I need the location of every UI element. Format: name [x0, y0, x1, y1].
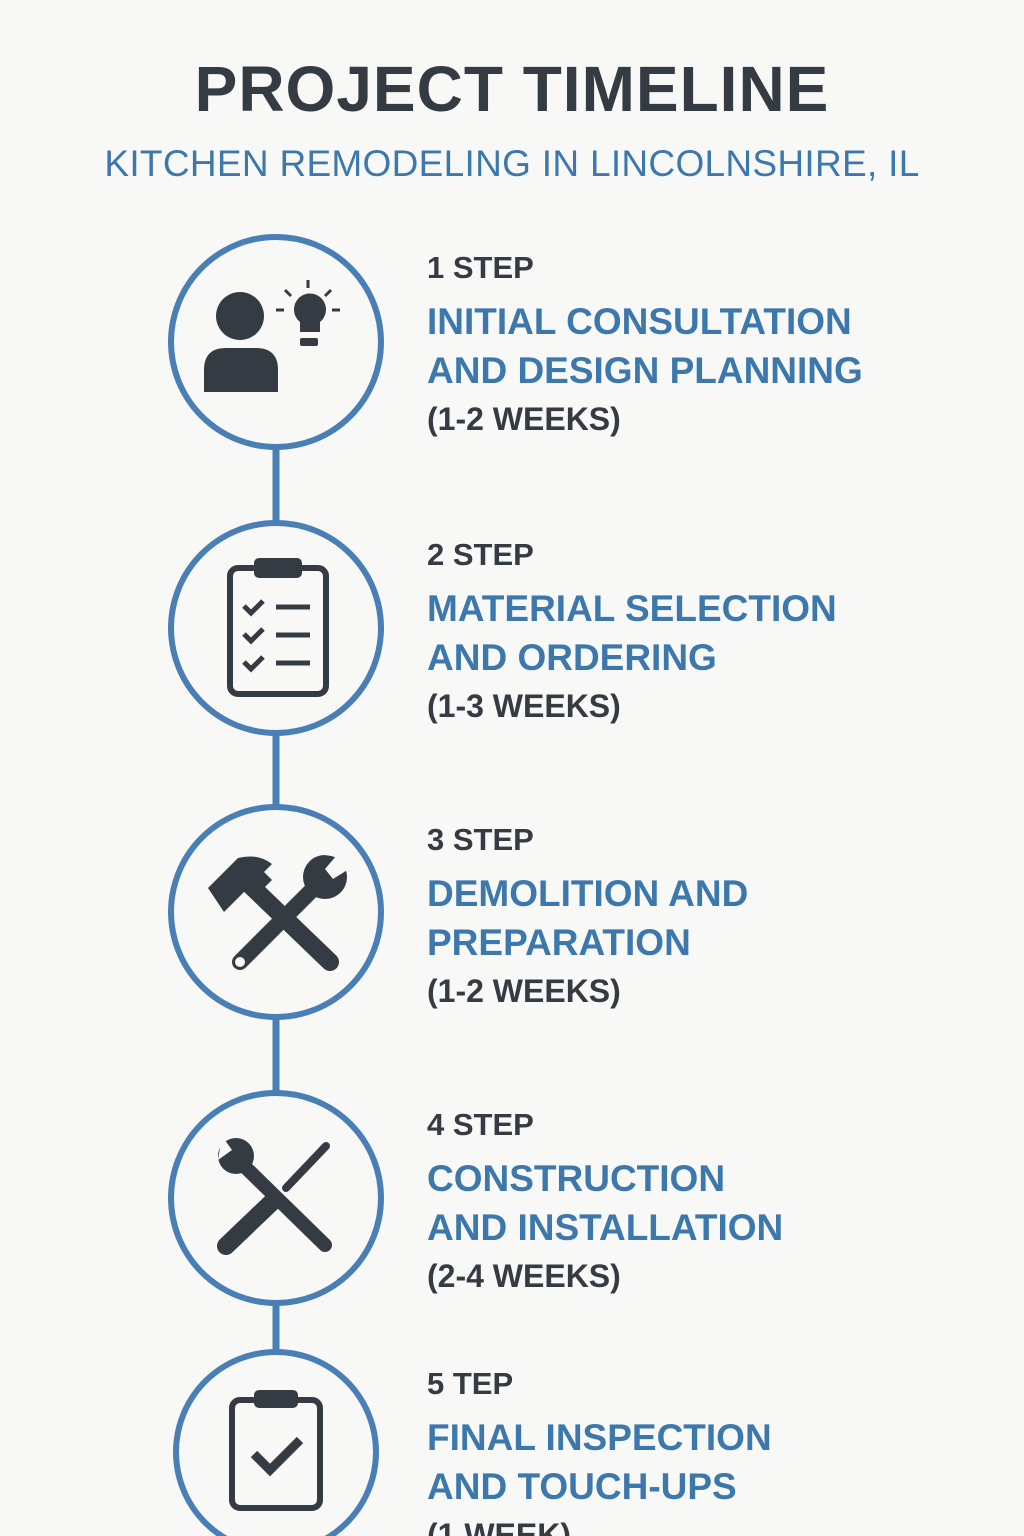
- step 4 text: CONSTRUCTION: [427, 1158, 725, 1199]
- step 5 text: FINAL INSPECTION: [427, 1417, 772, 1458]
- step 1 text: (1-2 WEEKS): [427, 401, 621, 437]
- connector lines: [272, 447, 280, 1352]
- step 2 text: MATERIAL SELECTION: [427, 588, 837, 629]
- circle 2 with clipboard checklist icon: [171, 523, 381, 733]
- subtitle: KITCHEN REMODELING IN LINCOLNSHIRE, IL: [104, 143, 920, 184]
- step 1 text: 1 STEP: [427, 250, 534, 285]
- step 2 text: (1-3 WEEKS): [427, 688, 621, 724]
- circle 1 with person and bulb icon: [171, 237, 381, 447]
- circle 5 with clipboard check icon: [176, 1352, 376, 1536]
- step 1 text: AND DESIGN PLANNING: [427, 350, 863, 391]
- step 3 text: [427, 822, 748, 1009]
- step 4 text: [427, 1107, 783, 1294]
- step 5 text: 5 TEP: [427, 1366, 513, 1401]
- step 2 text: 2 STEP: [427, 537, 534, 572]
- step 4 text: 4 STEP: [427, 1107, 534, 1142]
- step 5 text: [427, 1366, 772, 1536]
- step 1 text: INITIAL CONSULTATION: [427, 301, 852, 342]
- step 2 text: [427, 537, 837, 724]
- circle 4 with wrench and screwdriver icon: [171, 1093, 381, 1303]
- step 2 text: AND ORDERING: [427, 637, 717, 678]
- step 3 text: (1-2 WEEKS): [427, 973, 621, 1009]
- step 3 text: DEMOLITION AND: [427, 873, 748, 914]
- step 1 text: [427, 250, 863, 437]
- step 5 text: AND TOUCH-UPS: [427, 1466, 737, 1507]
- step 4 text: AND INSTALLATION: [427, 1207, 783, 1248]
- step 3 text: 3 STEP: [427, 822, 534, 857]
- title: PROJECT TIMELINE: [195, 53, 829, 125]
- circle 3 with hammer and wrench icon: [171, 807, 381, 1017]
- step 3 text: PREPARATION: [427, 922, 691, 963]
- step 4 text: (2-4 WEEKS): [427, 1258, 621, 1294]
